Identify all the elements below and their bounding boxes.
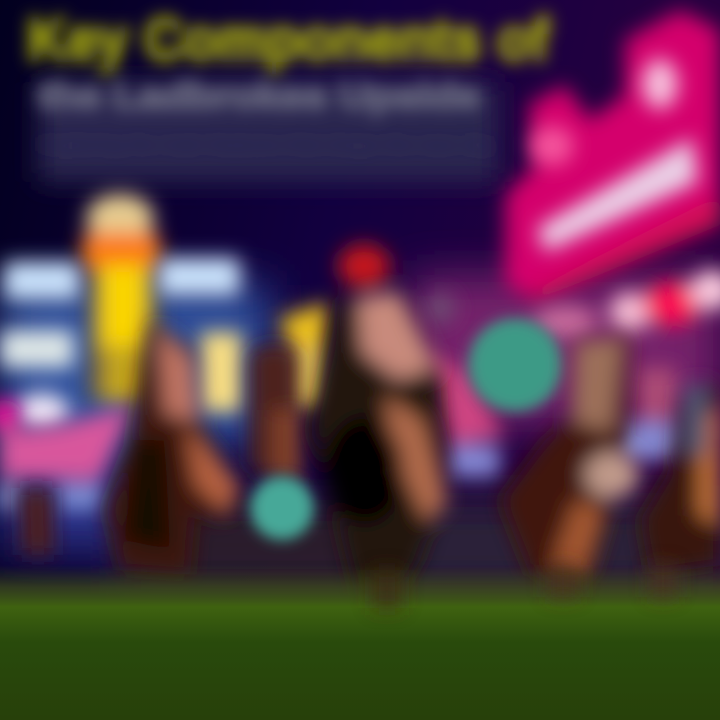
pink and blue lights right	[425, 270, 720, 477]
tower band	[82, 232, 160, 270]
horse legs on grass	[372, 565, 676, 608]
intro text: Exploring the main features that shape the race day	[40, 135, 496, 154]
title: Key Components of	[27, 6, 550, 73]
horse: far right	[640, 380, 720, 575]
teal ball upper	[468, 318, 562, 412]
panel: heading backdrop	[38, 82, 498, 182]
horse: centre left	[250, 345, 302, 480]
horse and jockey: left	[105, 320, 240, 575]
teal ball lower	[250, 476, 314, 540]
racetrack grass	[0, 565, 720, 720]
yellow flags	[200, 302, 328, 412]
neon sign	[505, 10, 720, 300]
horse and jockey: right	[500, 335, 639, 595]
subtitle: the Ladbrokes Upside	[38, 75, 480, 116]
sign label	[537, 138, 698, 252]
sign bulbs	[530, 59, 678, 166]
grandstand signs	[0, 258, 240, 429]
tower cap	[86, 194, 154, 242]
tower column	[100, 265, 146, 350]
sign frame	[505, 10, 720, 300]
horse: far left	[20, 488, 54, 555]
horse and jockey: centre	[310, 244, 448, 605]
pink banner left	[0, 399, 135, 509]
tower shadow	[88, 265, 158, 400]
tower	[82, 194, 160, 403]
grandstand lights backdrop	[0, 275, 720, 590]
